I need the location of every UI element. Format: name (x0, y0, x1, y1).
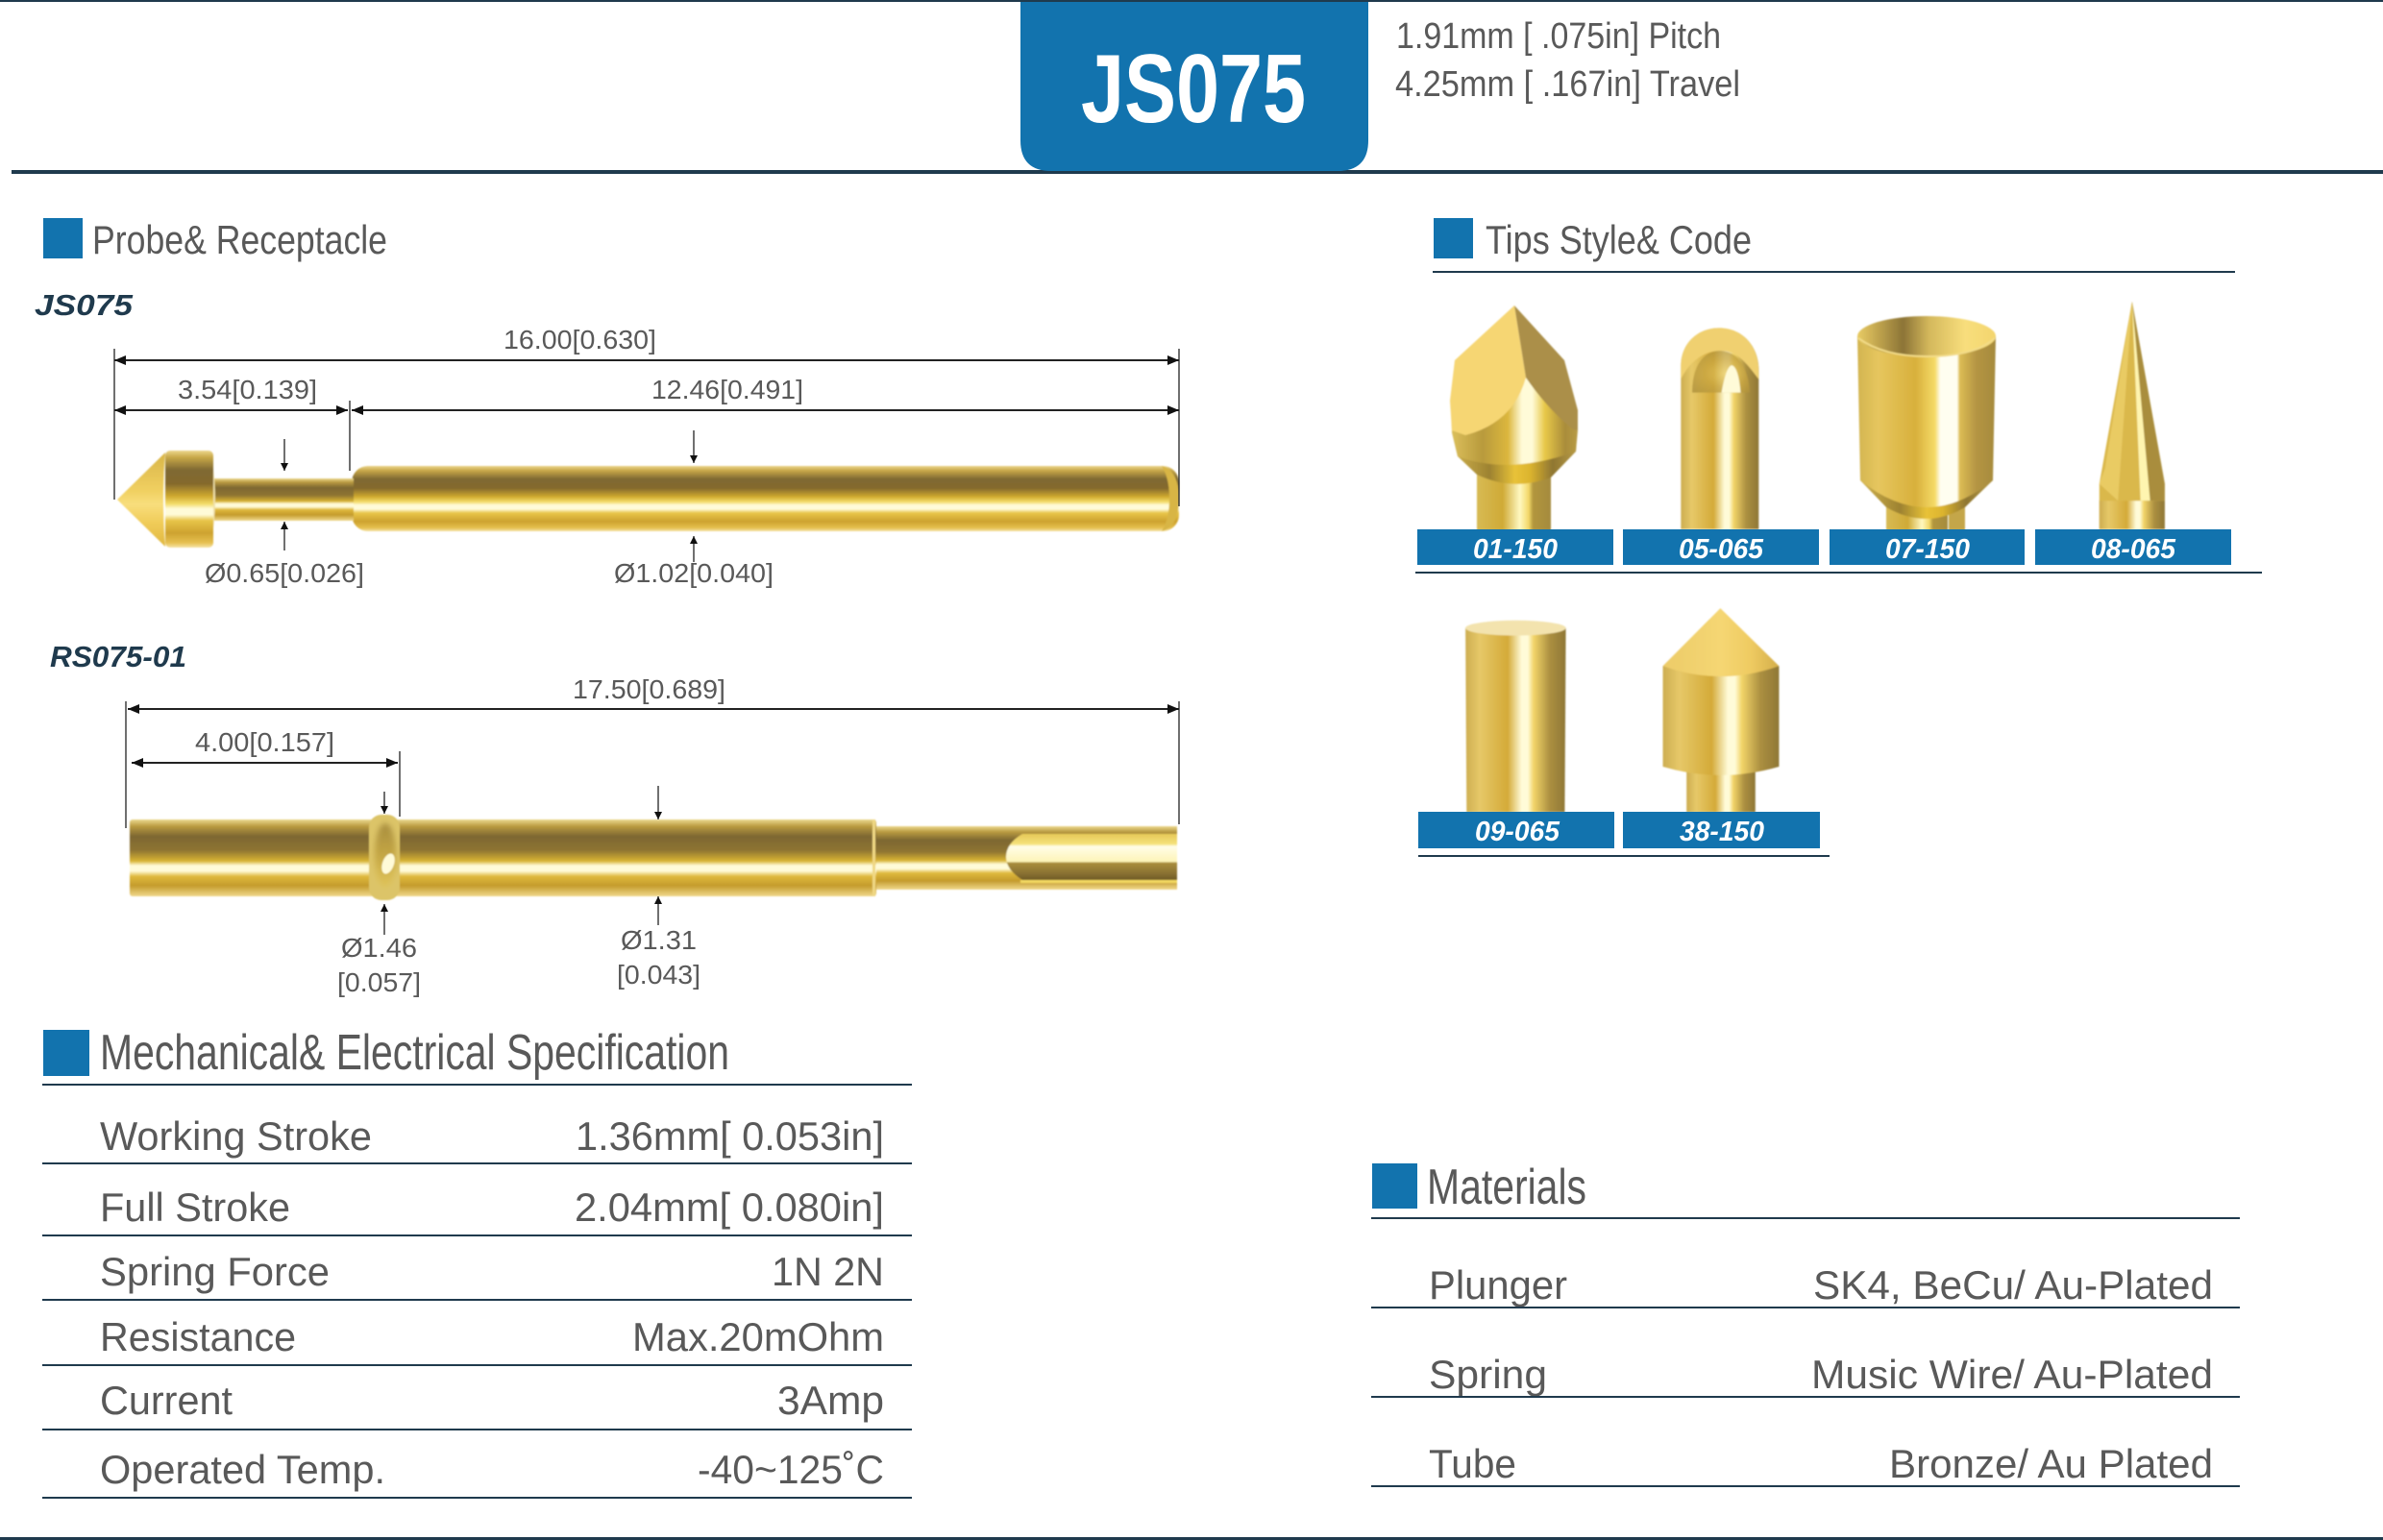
heading: mechanical and electrical specification: Mechanical& Electrical Specification (100, 1025, 729, 1081)
row: full stroke: 2.04mm[ 0.080in] (575, 1185, 884, 1230)
row: tube (1371, 1441, 2240, 1487)
dimensions: JS075 (114, 325, 1179, 588)
specification table (42, 1113, 912, 1499)
dimensions: RS075-01: 4.00[0.157] (195, 727, 334, 757)
row: resistance: Resistance (100, 1314, 296, 1359)
heading: tips style and code: Tips Style& Code (1486, 217, 1752, 262)
row: tube: Bronze/ Au Plated (1889, 1441, 2213, 1486)
row: plunger (1371, 1262, 2240, 1308)
row: spring: Music Wire/ Au-Plated (1811, 1352, 2213, 1397)
title tab: JS075 (1081, 36, 1306, 143)
row: spring: Spring (1429, 1352, 1547, 1397)
row: spring force: 1N 2N (772, 1249, 884, 1294)
row: plunger: SK4, BeCu/ Au-Plated (1813, 1262, 2213, 1308)
probe label: JS075: JS075 (35, 288, 134, 322)
dimensions: RS075-01: [0.057] (337, 967, 421, 997)
receptacle drawing: RS075-01 (130, 815, 1177, 900)
row: working stroke: 1.36mm[ 0.053in] (576, 1113, 884, 1159)
heading: tips style and code (1433, 217, 2235, 273)
pitch and travel summary (1395, 16, 1740, 105)
dimensions: JS075: 3.54[0.139] (178, 375, 317, 404)
row: current: Current (100, 1378, 233, 1423)
tip 38-150 (1663, 608, 1779, 812)
dimensions: JS075: 12.46[0.491] (651, 375, 803, 404)
pitch and travel summary: 4.25mm [ .167in] Travel (1395, 64, 1740, 105)
row: working stroke (42, 1113, 912, 1164)
row: operated temperature: -40~125˚C (698, 1447, 884, 1492)
tip code labels, row 1 (1415, 529, 2262, 574)
row: full stroke (42, 1185, 912, 1236)
dimensions: RS075-01: Ø1.31 (621, 925, 697, 955)
bottom border (0, 1537, 2383, 1540)
dimensions: JS075: Ø0.65[0.026] (205, 558, 364, 588)
tip illustrations (1450, 302, 2165, 812)
row: spring (1371, 1352, 2240, 1398)
tip 09-065 (1465, 621, 1566, 812)
receptacle label: RS075-01: RS075-01 (50, 640, 186, 673)
dimensions: RS075-01: 17.50[0.689] (573, 674, 725, 704)
pitch and travel summary: 1.91mm [ .075in] Pitch (1396, 16, 1721, 57)
title tab (1020, 2, 1368, 171)
tip code labels, row 1: 01-150 (1473, 534, 1558, 565)
tip 07-150 (1857, 316, 1996, 530)
heading: materials (1371, 1160, 2240, 1219)
row: tube: Tube (1429, 1441, 1516, 1486)
top border (0, 0, 2383, 2)
row: current: 3Amp (777, 1378, 884, 1423)
probe drawing: JS075 (117, 451, 1179, 548)
row: resistance: Max.20mOhm (632, 1314, 884, 1359)
dimensions: JS075: 16.00[0.630] (504, 325, 656, 354)
middle rule (12, 170, 2383, 174)
materials table (1371, 1262, 2240, 1487)
dimensions: RS075-01: Ø1.46 (341, 933, 417, 963)
row: spring force (42, 1249, 912, 1301)
row: spring force: Spring Force (100, 1249, 330, 1294)
tip 08-065 (2100, 302, 2165, 529)
tip code labels, row 1: 05-065 (1679, 534, 1764, 565)
tip code labels, row 2 (1418, 812, 1830, 857)
tip code labels, row 1: 08-065 (2091, 534, 2176, 565)
tip code labels, row 1: 07-150 (1885, 534, 1970, 565)
dimensions: JS075: Ø1.02[0.040] (614, 558, 774, 588)
dimensions: RS075-01 (126, 674, 1179, 997)
row: operated temperature: Operated Temp. (100, 1447, 385, 1492)
row: current (42, 1378, 912, 1430)
heading: probe and receptacle: Probe& Receptacle (92, 217, 387, 262)
dimensions: RS075-01: [0.043] (617, 960, 700, 990)
tip code labels, row 2: 09-065 (1475, 817, 1560, 847)
row: resistance (42, 1314, 912, 1366)
tip 05-065 (1681, 328, 1758, 529)
row: plunger: Plunger (1429, 1262, 1567, 1308)
row: full stroke: Full Stroke (100, 1185, 290, 1230)
row: operated temperature (42, 1447, 912, 1499)
tip code labels, row 2: 38-150 (1680, 817, 1764, 847)
heading: materials: Materials (1427, 1160, 1586, 1215)
row: working stroke: Working Stroke (100, 1113, 372, 1159)
tip 01-150 (1450, 306, 1578, 530)
